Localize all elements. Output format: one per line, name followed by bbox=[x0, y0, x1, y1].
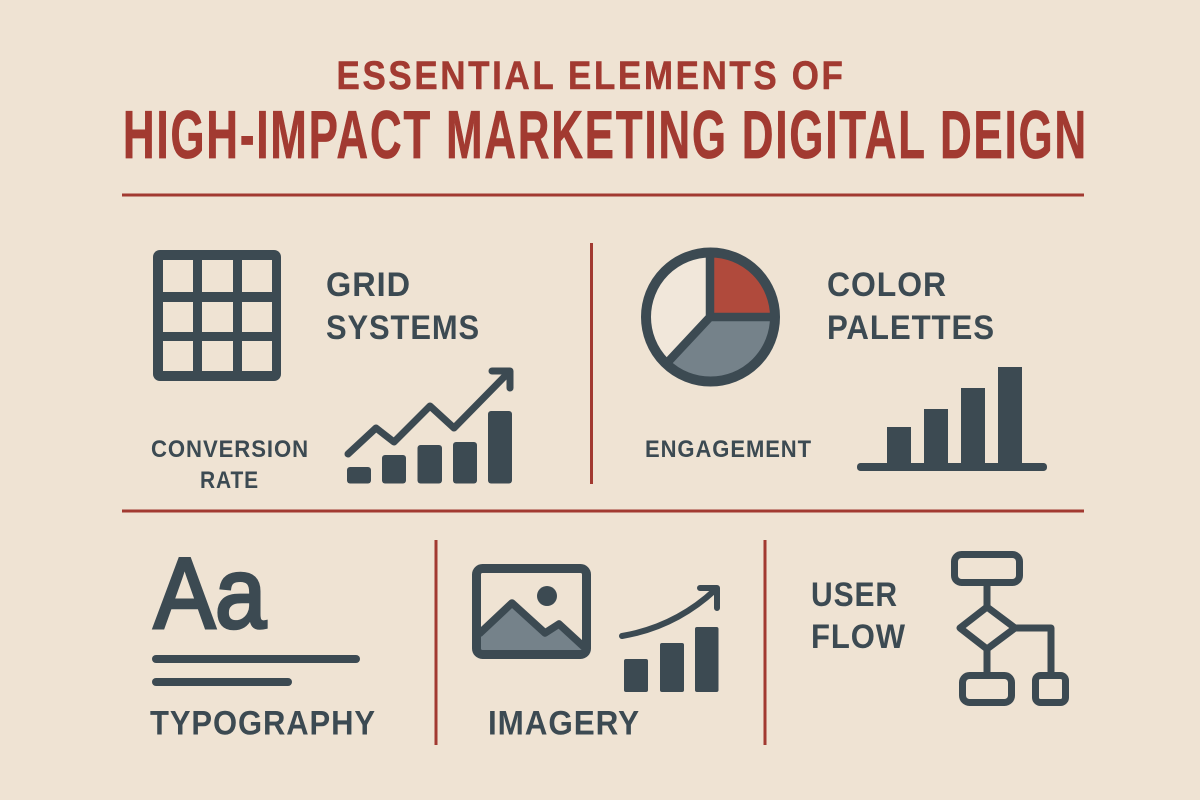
label: typography: TYPOGRAPHY bbox=[150, 704, 376, 742]
label: imagery: IMAGERY bbox=[488, 704, 640, 742]
chart: imagery bars bbox=[624, 627, 718, 692]
chart: conversion bars bbox=[347, 411, 512, 484]
panel: grid systems bbox=[153, 250, 480, 381]
icon: picture bbox=[476, 568, 586, 654]
icon: Aa specimen: Aa bbox=[154, 538, 266, 650]
arrow: conversion trend bbox=[348, 371, 510, 454]
title: ESSENTIAL ELEMENTS OF bbox=[336, 54, 846, 98]
panel: conversion rate bbox=[151, 371, 512, 494]
label: conversion rate: CONVERSION bbox=[151, 436, 309, 463]
panel: color palettes bbox=[646, 252, 995, 382]
heading: grid systems: GRID bbox=[326, 266, 411, 304]
panel: user flow: FLOW bbox=[811, 618, 906, 656]
icon: flowchart bbox=[954, 554, 1066, 702]
icon: pie chart bbox=[646, 252, 776, 382]
icon: grid bbox=[153, 250, 281, 381]
panel: grid systems: SYSTEMS bbox=[326, 309, 480, 347]
title bbox=[123, 54, 1088, 173]
panel: user flow bbox=[811, 554, 1066, 702]
panel: imagery bbox=[476, 568, 718, 742]
panel: typography bbox=[150, 538, 376, 742]
arrow: imagery trend bbox=[622, 588, 717, 636]
label: engagement: ENGAGEMENT bbox=[645, 436, 812, 463]
heading: color palettes: COLOR bbox=[827, 266, 947, 304]
panel: conversion rate: RATE bbox=[200, 467, 259, 494]
panel: color palettes: PALETTES bbox=[827, 309, 995, 347]
chart: engagement bars bbox=[857, 367, 1047, 471]
panel: engagement bbox=[645, 367, 1047, 471]
icon: text lines bbox=[152, 655, 360, 686]
heading: user flow: USER bbox=[811, 576, 898, 614]
